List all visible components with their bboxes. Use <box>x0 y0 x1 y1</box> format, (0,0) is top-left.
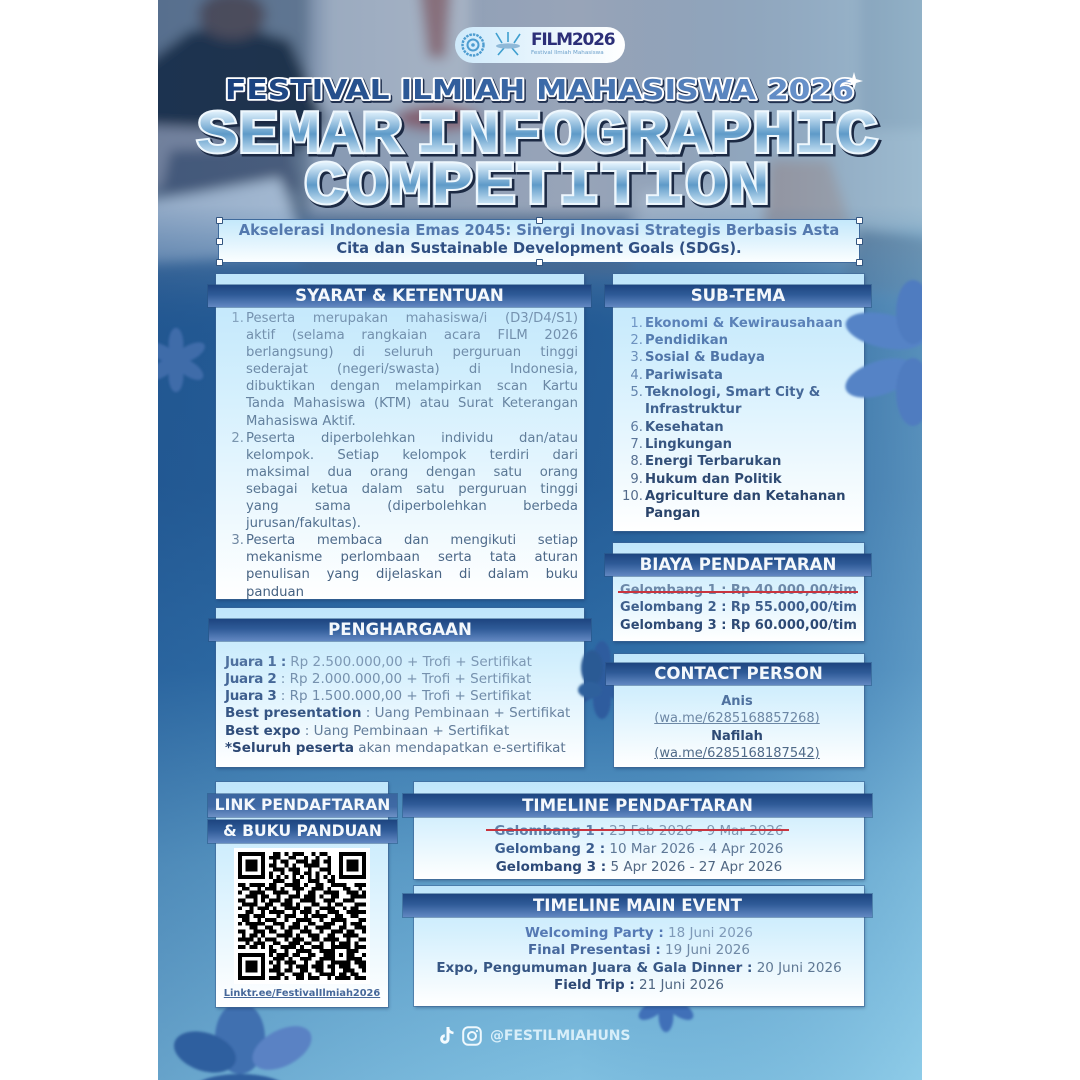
registration dates: Gelombang 2 : 10 Mar 2026 - 4 Apr 2026 <box>495 841 783 857</box>
heading: timeline main event <box>403 894 872 917</box>
heading: syarat: SYARAT & KETENTUAN <box>295 286 504 305</box>
title: semar infographic: INFOGRAPHIC <box>418 105 880 173</box>
panel: sub-tema: 7. <box>630 437 643 452</box>
title: semar infographic: SEMAR <box>199 105 404 173</box>
icon: festival splash <box>495 32 521 56</box>
panel: contact person <box>605 653 872 770</box>
contact details: (wa.me/6285168857268) <box>654 711 820 726</box>
panel: sub-tema: 6. <box>630 420 643 435</box>
heading: penghargaan: PENGHARGAAN <box>328 620 472 639</box>
social handle: @FESTILMIAHUNS <box>490 1028 630 1044</box>
sub-theme list: Pendidikan <box>645 333 728 348</box>
heading: biaya <box>605 554 871 576</box>
title: semar infographic: INFOGRAPHIC <box>416 103 878 171</box>
theme text: Cita dan Sustainable Development Goals (SDGs). <box>336 240 742 257</box>
sub-theme list: Energi Terbarukan <box>645 454 781 469</box>
title: semar infographic: SEMAR <box>197 103 402 171</box>
sub-theme list: Pangan <box>645 506 700 521</box>
qr code <box>234 848 370 980</box>
event dates: Welcoming Party : 18 Juni 2026 <box>525 924 753 940</box>
sub-theme list: Teknologi, Smart City & <box>645 385 820 400</box>
rules text: berlangsung) di seluruh perguruan tinggi <box>246 345 578 360</box>
rules text: dibuktikan dengan melampirkan scan Kartu <box>246 379 578 394</box>
panel: sub-tema: 9. <box>630 472 643 487</box>
panel: sub-tema: 2. <box>630 333 643 348</box>
logo tagline: Festival Ilmiah Mahasiswa <box>531 50 604 56</box>
heading: penghargaan <box>209 619 591 641</box>
awards list: Juara 3 : Rp 1.500.000,00 + Trofi + Sertifikat <box>225 688 531 704</box>
icon: sparkle <box>845 72 863 90</box>
panel: sub-tema: 3. <box>630 350 643 365</box>
panel: sub-tema: 5. <box>630 385 643 400</box>
rules text <box>231 311 578 600</box>
panel: penghargaan <box>208 607 592 770</box>
heading: biaya: BIAYA PENDAFTARAN <box>640 555 836 574</box>
rules text: kelompok. Setiap kelompok terdiri dari <box>246 448 578 463</box>
rules text: Peserta membaca dan mengikuti setiap <box>246 533 578 548</box>
flower overlapping panels <box>576 280 922 699</box>
title: festival ilmiah mahasiswa: FESTIVAL ILMIAH MAHASISWA 2026 <box>226 74 855 108</box>
panel: syarat & ketentuan: 2. <box>231 431 244 446</box>
event dates <box>436 924 842 993</box>
rules text: yang sama (diperbolehkan berbeda <box>246 499 578 514</box>
logo wordmark: FILM2026 <box>531 30 614 50</box>
sub-theme list <box>622 316 846 521</box>
title block <box>196 72 882 213</box>
registration dates: Gelombang 1 : 23 Feb 2026 - 9 Mar 2026 <box>494 822 784 838</box>
icon: university emblem <box>461 33 485 57</box>
poster background <box>158 0 922 1080</box>
title: semar infographic <box>197 103 880 173</box>
fee list <box>620 583 857 633</box>
awards list: Juara 1 : Rp 2.500.000,00 + Trofi + Sertifikat <box>225 654 532 670</box>
panel: link pendaftaran <box>207 781 398 1010</box>
icon: instagram <box>462 1026 482 1046</box>
registration link: Linktr.ee/FestivalIlmiah2026 <box>224 988 380 999</box>
panel: sub-tema: 1. <box>630 316 643 330</box>
contact details: Nafilah <box>711 729 763 744</box>
panel: biaya pendaftaran <box>604 542 872 644</box>
awards list: Best expo : Uang Pembinaan + Sertifikat <box>225 723 509 739</box>
panel: timeline pendaftaran <box>402 781 873 882</box>
contact details <box>654 694 820 761</box>
rules text: Peserta diperbolehkan individu dan/atau <box>246 431 578 446</box>
rules text: Tanda Mahasiswa (KTM) atau Surat Keterangan <box>246 396 578 411</box>
rules text: penulisan yang dijelaskan di dalam buku <box>246 567 578 582</box>
rules text: maksimal dua orang dengan satu orang <box>246 465 578 480</box>
heading: sub-tema: SUB-TEMA <box>691 286 785 305</box>
sub-theme list: Agriculture dan Ketahanan <box>645 489 846 504</box>
panel: sub-tema: 8. <box>630 454 643 469</box>
panel: sub-tema <box>604 273 872 534</box>
theme text <box>238 222 839 257</box>
sub-theme list: Pariwisata <box>645 368 723 383</box>
rules text: sebagai ketua dalam satu perguruan tinggi <box>246 482 578 497</box>
heading: contact: CONTACT PERSON <box>654 664 823 683</box>
panel: sub-tema: 10. <box>622 489 643 504</box>
registration dates <box>494 822 784 875</box>
awards list: Juara 2 : Rp 2.000.000,00 + Trofi + Sertifikat <box>225 671 531 687</box>
social media footer <box>440 1026 630 1046</box>
theme box <box>219 220 859 262</box>
panel: syarat & ketentuan: 1. <box>231 311 244 326</box>
event dates: Final Presentasi : 19 Juni 2026 <box>528 942 750 958</box>
panel: sub-tema: 4. <box>630 368 643 383</box>
logo badge <box>455 27 625 63</box>
registration dates: Gelombang 3 : 5 Apr 2026 - 27 Apr 2026 <box>496 859 782 875</box>
heading: buku panduan: & BUKU PANDUAN <box>223 822 382 840</box>
heading: buku panduan <box>208 820 397 843</box>
title: festival ilmiah mahasiswa: FESTIVAL ILMIAH MAHASISWA 2026 <box>225 73 854 106</box>
contact details: Anis <box>721 694 753 709</box>
sub-theme list: Infrastruktur <box>645 402 741 417</box>
panel: timeline main event <box>402 885 873 1010</box>
heading: syarat <box>208 285 591 307</box>
rules text: jurusan/fakultas). <box>246 516 361 531</box>
sub-theme list: Hukum dan Politik <box>645 472 782 487</box>
fee list: Gelombang 1 : Rp 40.000,00/tim <box>620 583 857 598</box>
icon: tiktok <box>440 1027 454 1044</box>
heading: contact <box>606 663 871 685</box>
panel: syarat & ketentuan: 3. <box>231 533 244 548</box>
heading: link pendaftaran: LINK PENDAFTARAN <box>215 796 390 814</box>
sub-theme list: Ekonomi & Kewirausahaan <box>645 316 843 330</box>
contact details: (wa.me/6285168187542) <box>654 746 820 761</box>
fee list: Gelombang 2 : Rp 55.000,00/tim <box>620 600 857 615</box>
awards list: *Seluruh peserta akan mendapatkan e-sertifikat <box>225 740 566 756</box>
rules text: aktif (selama rangkaian acara FILM 2026 <box>246 328 578 343</box>
heading: sub-tema <box>605 285 871 307</box>
rules text: Mahasiswa Aktif. <box>246 414 356 429</box>
rules text: panduan <box>246 584 304 600</box>
heading: timeline pendaftaran: TIMELINE PENDAFTARAN <box>522 796 753 815</box>
awards list: Best presentation : Uang Pembinaan + Sertifikat <box>225 705 570 721</box>
heading: timeline main event: TIMELINE MAIN EVENT <box>533 896 742 915</box>
sub-theme list: Sosial & Budaya <box>645 350 765 365</box>
sub-theme list: Kesehatan <box>645 420 724 435</box>
theme text: Akselerasi Indonesia Emas 2045: Sinergi Inovasi Strategis Berbasis Asta <box>239 222 839 239</box>
rules text: sederajat (negeri/swasta) di Indonesia, <box>246 362 578 377</box>
sub-theme list: Lingkungan <box>645 437 732 452</box>
event dates: Field Trip : 21 Juni 2026 <box>554 977 724 993</box>
rules text: mekanisme perlombaan serta tata aturan <box>246 550 578 565</box>
heading: timeline pendaftaran <box>403 794 872 817</box>
panel: syarat & ketentuan <box>207 274 592 602</box>
event dates: Expo, Pengumuman Juara & Gala Dinner : 20 Juni 2026 <box>436 960 842 976</box>
awards list <box>224 654 570 756</box>
rules text: Peserta merupakan mahasiswa/i (D3/D4/S1) <box>246 311 578 326</box>
fee list: Gelombang 3 : Rp 60.000,00/tim <box>620 618 857 633</box>
